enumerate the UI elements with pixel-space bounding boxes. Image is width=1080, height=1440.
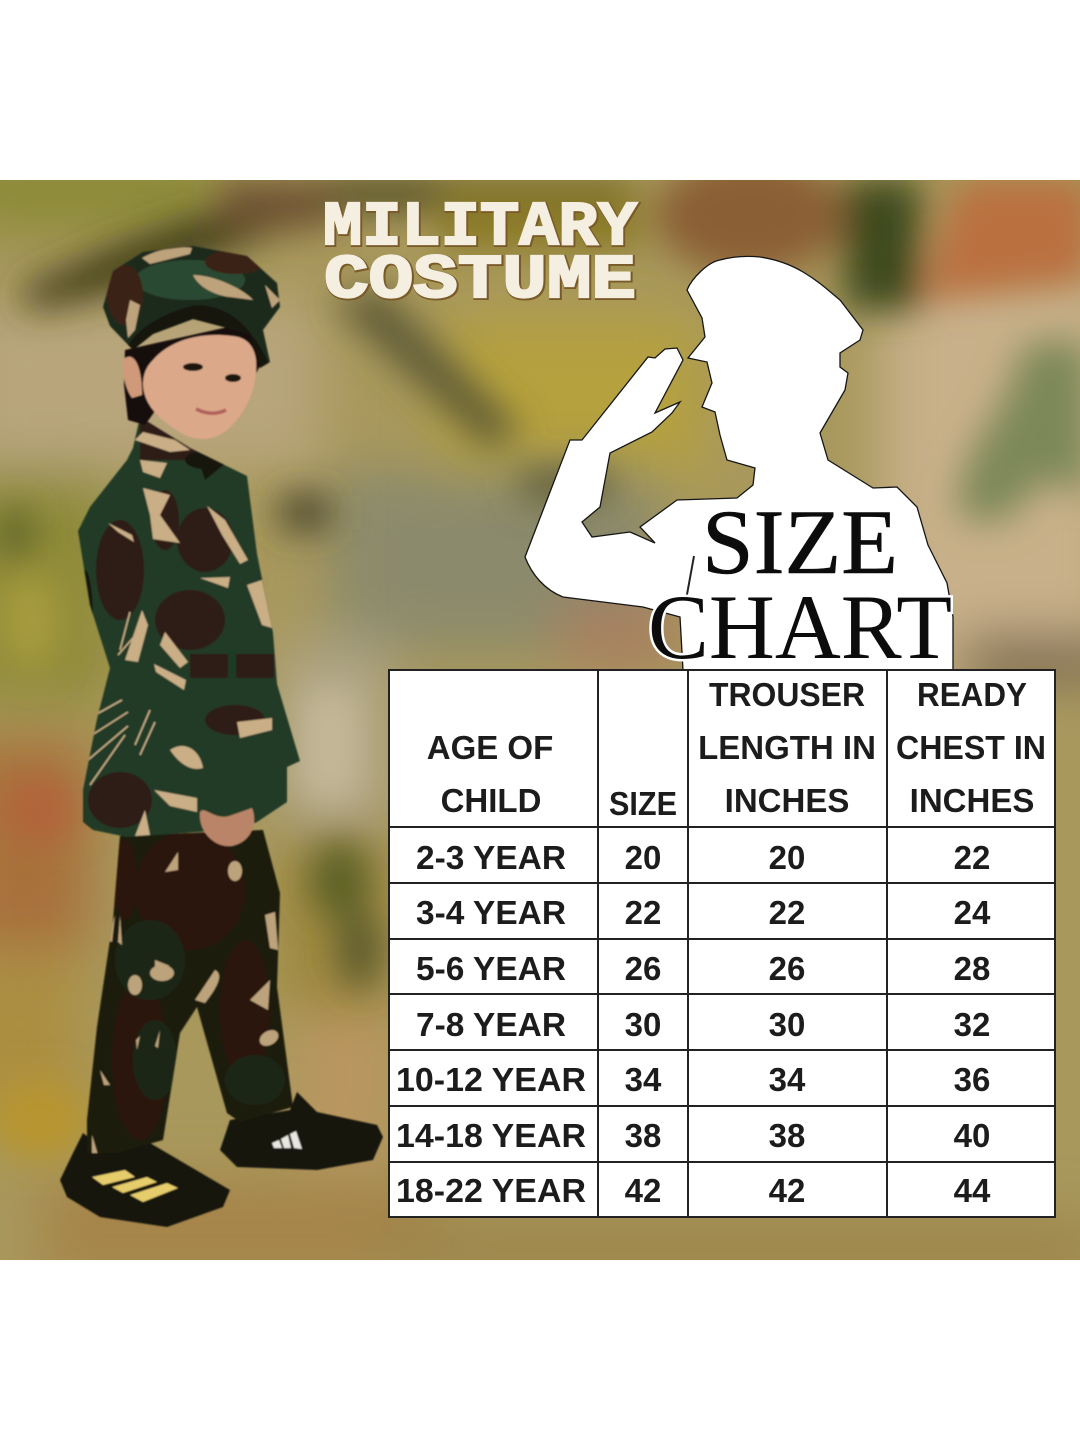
row 2-3 year: 20 xyxy=(769,839,805,876)
row 10-12 year: 10-12 YEAR xyxy=(396,1061,586,1098)
title xyxy=(323,192,639,317)
row 5-6 year: 26 xyxy=(625,950,661,987)
row 2-3 year: 2-3 YEAR xyxy=(416,839,566,876)
row 2-3 year: 22 xyxy=(954,839,990,876)
row 10-12 year: 36 xyxy=(954,1061,990,1098)
row 3-4 year: 22 xyxy=(625,894,661,931)
row 14-18 year xyxy=(396,1117,990,1154)
row 18-22 year: 18-22 YEAR xyxy=(396,1172,586,1209)
title: COSTUME xyxy=(325,246,637,317)
header row: READY xyxy=(917,676,1027,713)
header row xyxy=(427,676,1046,822)
silhouette crease xyxy=(686,556,694,600)
row 5-6 year: 28 xyxy=(954,950,990,987)
row 10-12 year: 34 xyxy=(769,1061,806,1098)
header row: TROUSER xyxy=(709,676,865,713)
size chart table xyxy=(389,670,1055,1217)
header row: INCHES xyxy=(910,782,1034,819)
header row: CHILD xyxy=(441,782,541,819)
row 3-4 year: 3-4 YEAR xyxy=(416,894,566,931)
trousers xyxy=(80,825,300,1165)
row 2-3 year: 20 xyxy=(625,839,661,876)
size chart heading xyxy=(648,491,952,678)
saluting soldier silhouette xyxy=(525,256,953,670)
row 18-22 year: 42 xyxy=(769,1172,805,1209)
cap xyxy=(102,245,281,369)
row 7-8 year: 7-8 YEAR xyxy=(416,1006,566,1043)
row 5-6 year: 5-6 YEAR xyxy=(416,950,566,987)
title: MILITARY xyxy=(324,193,639,264)
row 7-8 year: 32 xyxy=(954,1006,990,1043)
row 2-3 year xyxy=(416,839,990,876)
row 5-6 year xyxy=(416,950,990,987)
row 3-4 year xyxy=(416,894,991,931)
row 10-12 year: 34 xyxy=(625,1061,662,1098)
blurred background photo xyxy=(0,150,1080,1280)
row 7-8 year: 30 xyxy=(769,1006,805,1043)
table grid xyxy=(389,670,1055,1217)
front shoe xyxy=(60,1133,230,1227)
row 18-22 year: 44 xyxy=(954,1172,991,1209)
row 14-18 year: 38 xyxy=(625,1117,661,1154)
title: MILITARY xyxy=(323,192,638,263)
header row: LENGTH IN xyxy=(698,729,876,766)
header row: SIZE xyxy=(609,785,677,822)
row 7-8 year: 30 xyxy=(625,1006,661,1043)
row 14-18 year: 40 xyxy=(954,1117,990,1154)
row 18-22 year: 42 xyxy=(625,1172,661,1209)
row 18-22 year xyxy=(396,1172,991,1209)
row 14-18 year: 14-18 YEAR xyxy=(396,1117,586,1154)
header row: AGE OF xyxy=(427,729,553,766)
row 7-8 year xyxy=(416,1006,990,1043)
row 5-6 year: 26 xyxy=(769,950,805,987)
header row: CHEST IN xyxy=(896,729,1046,766)
row 14-18 year: 38 xyxy=(769,1117,805,1154)
hand xyxy=(200,808,254,846)
row 3-4 year: 22 xyxy=(769,894,805,931)
back shoe xyxy=(220,1092,383,1170)
head xyxy=(123,322,262,439)
size chart heading: CHART xyxy=(648,576,952,678)
title: COSTUME xyxy=(324,245,636,316)
jacket xyxy=(75,415,305,840)
header row: INCHES xyxy=(725,782,849,819)
boy in camouflage uniform xyxy=(60,240,383,1227)
row 10-12 year xyxy=(396,1061,990,1098)
row 3-4 year: 24 xyxy=(954,894,991,931)
size chart heading: SIZE xyxy=(702,491,898,593)
